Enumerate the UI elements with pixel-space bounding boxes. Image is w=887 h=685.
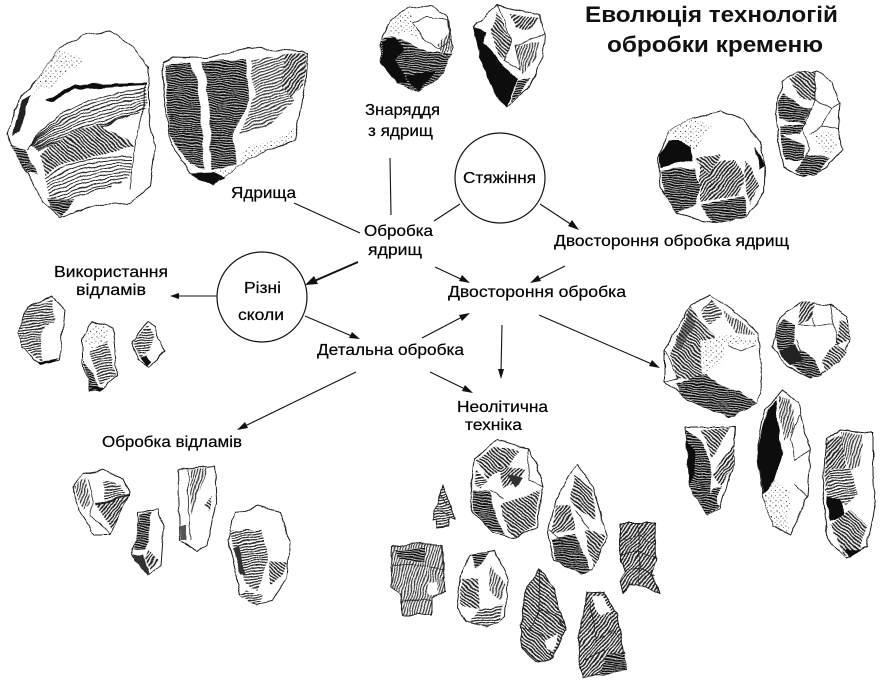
stone: neolithic notched point <box>620 523 659 593</box>
label: Ядрища: Ядрища <box>231 185 296 202</box>
title: обробки кременю <box>607 32 823 57</box>
label: Використання відламів: Використання <box>54 264 168 281</box>
label: Використання відламів <box>54 264 168 299</box>
circle: Стяжіння: Стяжіння <box>463 170 536 187</box>
arrow: bifacial working to bifaces <box>539 315 660 368</box>
stone: neolithic lanceolate point <box>520 568 565 662</box>
arrow: detailed to bifacial working <box>422 313 470 338</box>
stone: bifacial core round <box>658 111 766 223</box>
stone: side-view biface <box>757 390 810 535</box>
arrow: core working to various flakes <box>305 262 358 285</box>
arrow: various flakes to use of flakes <box>170 293 217 299</box>
stone: pointed core tool <box>473 5 545 107</box>
stone: bifacial oval <box>776 72 842 178</box>
circle: Різні сколи <box>217 252 307 342</box>
stone: round biface <box>772 303 850 378</box>
arrow: bifacial core to bifacial working <box>530 266 565 283</box>
arrow: knapping to bifacial core <box>540 204 579 230</box>
circle: Різні сколи: сколи <box>238 307 284 324</box>
stone: worked flake one <box>73 470 130 535</box>
label: Неолітична техніка: техніка <box>465 417 522 434</box>
label: Обробка ядрищ: Обробка <box>364 223 433 240</box>
stone: neolithic blade tool <box>578 592 627 678</box>
circle: Стяжіння <box>455 133 545 223</box>
label: Обробка відламів: Обробка відламів <box>102 434 242 451</box>
stone: triangular biface <box>685 427 735 515</box>
stone: neolithic leaf point <box>548 463 607 573</box>
stone: small core tool <box>380 7 453 92</box>
title <box>585 2 838 57</box>
stone: large biface <box>665 295 763 417</box>
label: Знаряддя з ядрищ: Знаряддя <box>365 102 440 119</box>
title: Еволюція технологій <box>585 2 838 27</box>
connector: tools from core <box>390 158 391 215</box>
stone: elongated biface <box>823 430 875 557</box>
stone: faceted flake <box>82 322 117 392</box>
label: Детальна обробка: Детальна обробка <box>317 342 464 359</box>
label: Неолітична техніка: Неолітична <box>457 399 548 416</box>
stone: neolithic stemmed tool <box>390 543 445 615</box>
label: Обробка ядрищ <box>364 223 433 259</box>
stone: blade flake <box>178 466 217 551</box>
label: Обробка ядрищ: ядрищ <box>368 242 422 259</box>
arrow: core working to bifacial working <box>435 267 470 283</box>
arrow: various flakes to detailed working <box>305 316 360 339</box>
stone: neolithic arrowhead <box>432 485 455 528</box>
stone: worked flake two <box>132 508 163 575</box>
stone: neolithic oval tool <box>457 550 507 627</box>
stone: large core second <box>162 48 307 185</box>
connector: knapping to core working <box>434 204 460 221</box>
stone: flake with ripples <box>20 297 65 365</box>
arrow: detailed to neolithic <box>430 372 473 393</box>
connector: core to core working <box>294 203 360 233</box>
stone: large core left <box>7 32 155 217</box>
label: Двостороння обробка ядрищ: Двостороння обробка ядрищ <box>554 233 789 250</box>
stone: large scraper flake <box>228 506 290 606</box>
stone: neolithic large core <box>470 440 543 538</box>
label: Використання відламів: відламів <box>76 282 146 299</box>
arrow: detailed to worked flakes <box>237 372 356 430</box>
label: Знаряддя з ядрищ <box>365 102 440 140</box>
circle: Різні сколи: Різні <box>244 280 281 297</box>
label: Двостороння обробка: Двостороння обробка <box>448 284 626 301</box>
label: Неолітична техніка <box>457 399 548 434</box>
arrow: bifacial working to neolithic <box>498 325 504 379</box>
label: Знаряддя з ядрищ: з ядрищ <box>368 123 433 140</box>
stone: small flake <box>132 322 164 367</box>
